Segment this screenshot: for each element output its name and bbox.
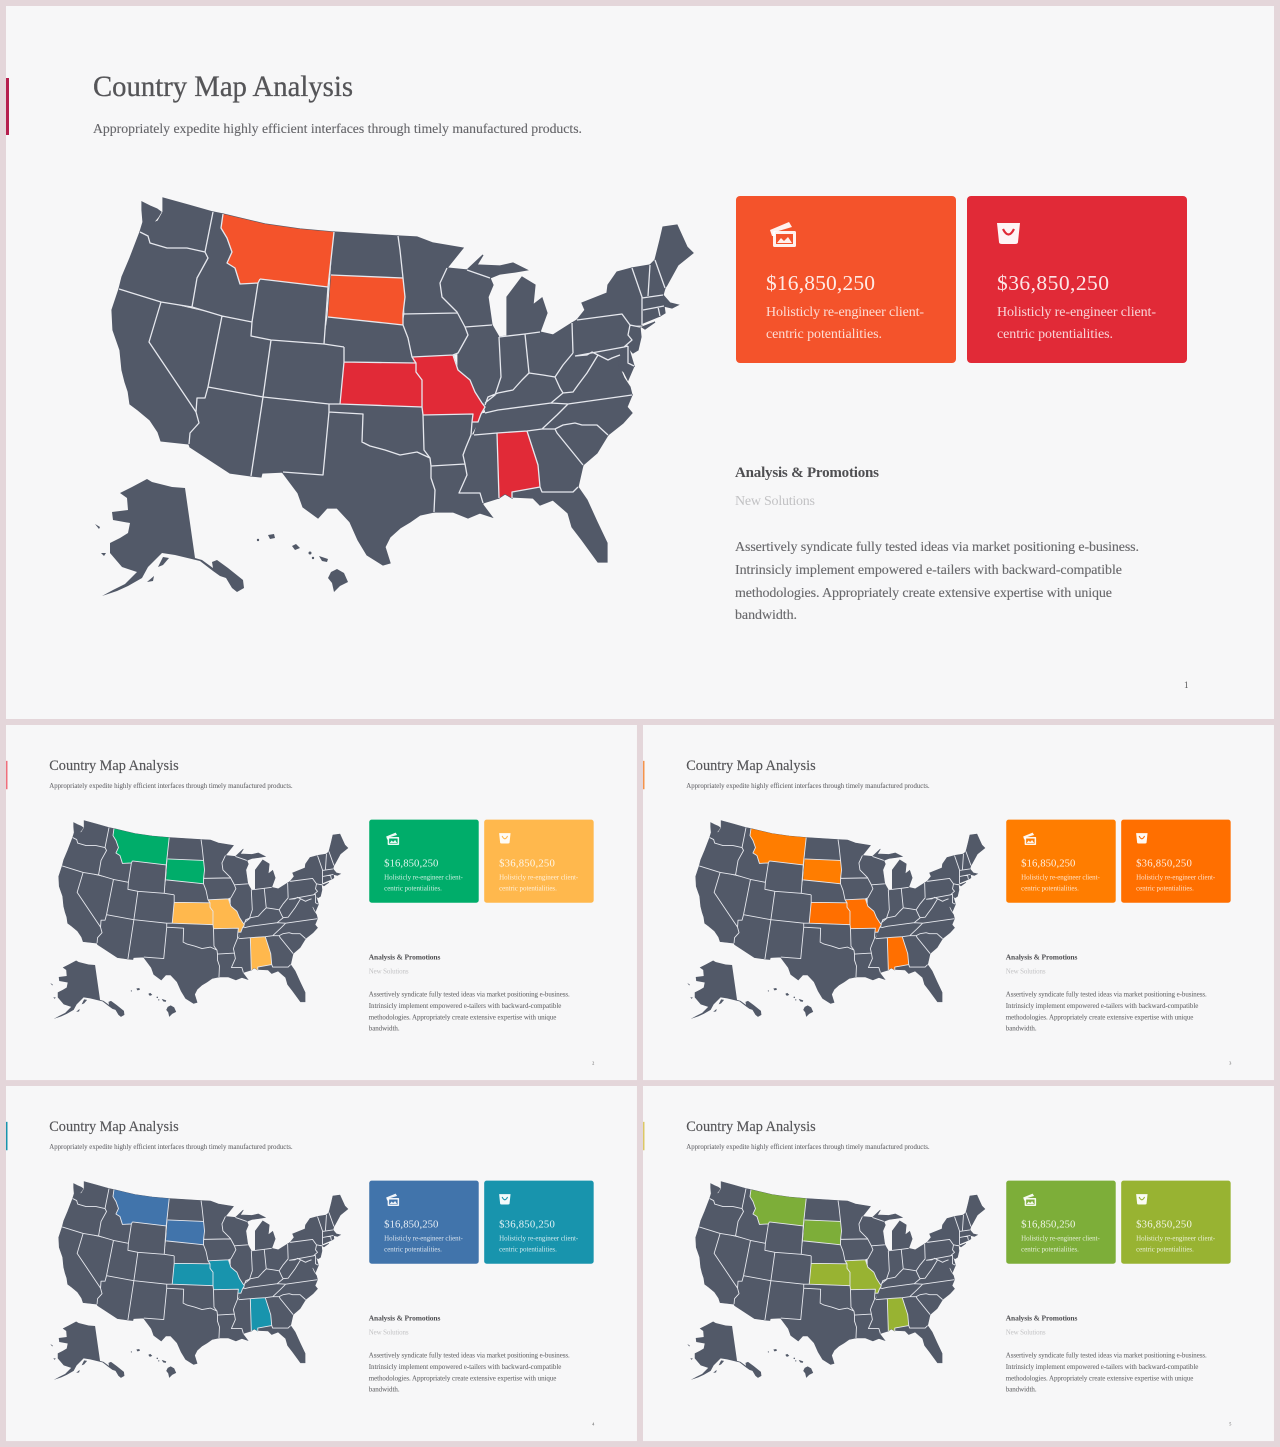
icon: photos xyxy=(1023,1194,1036,1206)
text block: description xyxy=(735,540,1139,623)
card: first value: centric potentialities. xyxy=(1021,884,1079,892)
text block: description: Intrinsicly implement empowered e-tailers with backward-compatible xyxy=(369,1363,561,1371)
card: first value: $16,850,250 xyxy=(384,1218,438,1230)
panel: slide 4 blue and teal xyxy=(6,1086,637,1441)
card: second value: Holisticly re-engineer client- xyxy=(499,1234,579,1242)
subtitle: Appropriately expedite highly efficient interfaces through timely manufactured products. xyxy=(93,122,582,137)
subheading: New Solutions xyxy=(369,967,409,976)
card: first value: $16,850,250 xyxy=(1021,1218,1075,1230)
card: second value: centric potentialities. xyxy=(997,327,1113,342)
panel: slide 3 orange xyxy=(643,725,1274,1080)
text block: description: bandwidth. xyxy=(369,1024,400,1032)
icon: photos xyxy=(770,222,796,247)
icon: photos xyxy=(1023,833,1036,845)
heading: Analysis & Promotions xyxy=(1006,1314,1077,1323)
panel: main slide xyxy=(6,6,1274,719)
map: United States with highlighted states xyxy=(95,198,693,596)
card: first value: centric potentialities. xyxy=(384,1245,442,1253)
card: second value: Holisticly re-engineer client- xyxy=(1136,1234,1216,1242)
card: first value: Holisticly re-engineer client- xyxy=(1021,1234,1100,1242)
text block: description: Intrinsicly implement empowered e-tailers with backward-compatible xyxy=(1006,1002,1198,1010)
title: Country Map Analysis xyxy=(686,758,816,774)
map: United States xyxy=(687,1182,985,1380)
card: second value xyxy=(1121,820,1231,903)
card: first value xyxy=(1006,1181,1116,1264)
text block: description: methodologies. Appropriately create extensive expertise with unique xyxy=(369,1374,556,1382)
card: second value: centric potentialities. xyxy=(499,1245,557,1253)
icon: bag xyxy=(997,223,1020,244)
accent bar xyxy=(643,1122,644,1150)
heading: analysis and promotions: Analysis & Promotions xyxy=(735,465,879,481)
card: second value: centric potentialities. xyxy=(1136,884,1194,892)
panel: slide 5 green xyxy=(643,1086,1274,1441)
subtitle: Appropriately expedite highly efficient interfaces through timely manufactured products. xyxy=(49,1143,293,1151)
text block: description: Assertively syndicate fully tested ideas via market positioning e-business. xyxy=(1006,1351,1207,1359)
text block: description xyxy=(369,990,570,1032)
card: first value: Holisticly re-engineer client- xyxy=(384,1234,463,1242)
text block: description: Assertively syndicate fully tested ideas via market positioning e-business. xyxy=(1006,990,1207,998)
text block: description xyxy=(1006,990,1207,1032)
text block: description: methodologies. Appropriately create extensive expertise with unique xyxy=(1006,1374,1193,1382)
text block: description: methodologies. Appropriately create extensive expertise with unique xyxy=(369,1013,556,1021)
subtitle: Appropriately expedite highly efficient interfaces through timely manufactured products. xyxy=(686,1143,930,1151)
text block: description: Assertively syndicate fully tested ideas via market positioning e-business. xyxy=(735,540,1139,555)
text block: description xyxy=(1006,1351,1207,1393)
card: second value xyxy=(484,820,594,903)
subheading: New Solutions xyxy=(1006,967,1046,976)
card: second value xyxy=(1121,1181,1231,1264)
title: Country Map Analysis xyxy=(49,1119,179,1135)
title: Country Map Analysis xyxy=(686,1119,816,1135)
map: United States xyxy=(687,821,985,1019)
text block: description: methodologies. Appropriately create extensive expertise with unique xyxy=(1006,1013,1193,1021)
panel: slide 2 green and yellow xyxy=(6,725,637,1080)
page number: 3 xyxy=(1229,1061,1232,1066)
card: second value: $36,850,250 xyxy=(499,1218,555,1230)
icon: photos xyxy=(386,1194,399,1206)
card: second value xyxy=(967,196,1187,363)
page number: 5 xyxy=(1229,1422,1232,1427)
text block: description: bandwidth. xyxy=(1006,1024,1037,1032)
icon: bag xyxy=(1136,1194,1148,1205)
subheading: New Solutions xyxy=(1006,1328,1046,1337)
accent bar xyxy=(6,761,7,789)
text block: description: methodologies. Appropriately create extensive expertise with unique xyxy=(735,586,1112,601)
card: first value: $16,850,250 xyxy=(766,271,875,295)
map: United States xyxy=(50,1182,348,1380)
card: second value: Holisticly re-engineer client- xyxy=(1136,873,1216,881)
card: first value: centric potentialities. xyxy=(1021,1245,1079,1253)
card: first value: Holisticly re-engineer client- xyxy=(384,873,463,881)
card: second value: Holisticly re-engineer client- xyxy=(997,305,1156,320)
card: first value: Holisticly re-engineer client- xyxy=(1021,873,1100,881)
card: second value: $36,850,250 xyxy=(1136,1218,1192,1230)
icon: bag xyxy=(499,833,511,844)
icon: photos xyxy=(386,833,399,845)
card: second value: $36,850,250 xyxy=(997,271,1109,295)
text block: description: Assertively syndicate fully tested ideas via market positioning e-business. xyxy=(369,990,570,998)
card: second value: Holisticly re-engineer client- xyxy=(499,873,579,881)
accent bar xyxy=(6,1122,7,1150)
heading: Analysis & Promotions xyxy=(369,953,440,962)
card: second value xyxy=(484,1181,594,1264)
text block: description: Intrinsicly implement empowered e-tailers with backward-compatible xyxy=(369,1002,561,1010)
text block: description: Assertively syndicate fully tested ideas via market positioning e-business. xyxy=(369,1351,570,1359)
accent bar xyxy=(6,78,9,135)
text block: description: Intrinsicly implement empowered e-tailers with backward-compatible xyxy=(735,563,1122,578)
card: first value xyxy=(736,196,956,363)
accent bar xyxy=(643,761,644,789)
card: first value: $16,850,250 xyxy=(1021,857,1075,869)
heading: Analysis & Promotions xyxy=(369,1314,440,1323)
card: first value: centric potentialities. xyxy=(766,327,882,342)
heading: Analysis & Promotions xyxy=(1006,953,1077,962)
text block: description xyxy=(369,1351,570,1393)
map: United States xyxy=(50,821,348,1019)
card: second value: $36,850,250 xyxy=(1136,857,1192,869)
text block: description: bandwidth. xyxy=(1006,1385,1037,1393)
card: first value xyxy=(1006,820,1116,903)
subheading: New Solutions xyxy=(735,494,815,509)
card: first value: Holisticly re-engineer client- xyxy=(766,305,924,320)
title: Country Map Analysis xyxy=(93,70,353,103)
card: second value: centric potentialities. xyxy=(1136,1245,1194,1253)
subheading: New Solutions xyxy=(369,1328,409,1337)
text block: description: Intrinsicly implement empowered e-tailers with backward-compatible xyxy=(1006,1363,1198,1371)
page number: 4 xyxy=(592,1422,595,1427)
card: first value xyxy=(369,1181,479,1264)
title: Country Map Analysis xyxy=(49,758,179,774)
icon: bag xyxy=(1136,833,1148,844)
subtitle: Appropriately expedite highly efficient interfaces through timely manufactured products. xyxy=(49,782,293,790)
card: second value: $36,850,250 xyxy=(499,857,555,869)
card: first value xyxy=(369,820,479,903)
page number: 2 xyxy=(592,1061,594,1066)
subtitle: Appropriately expedite highly efficient interfaces through timely manufactured products. xyxy=(686,782,930,790)
card: second value: centric potentialities. xyxy=(499,884,557,892)
text block: description: bandwidth. xyxy=(735,608,797,623)
card: first value: $16,850,250 xyxy=(384,857,438,869)
card: first value: centric potentialities. xyxy=(384,884,442,892)
icon: bag xyxy=(499,1194,511,1205)
page number: 1 xyxy=(1184,680,1188,690)
text block: description: bandwidth. xyxy=(369,1385,400,1393)
